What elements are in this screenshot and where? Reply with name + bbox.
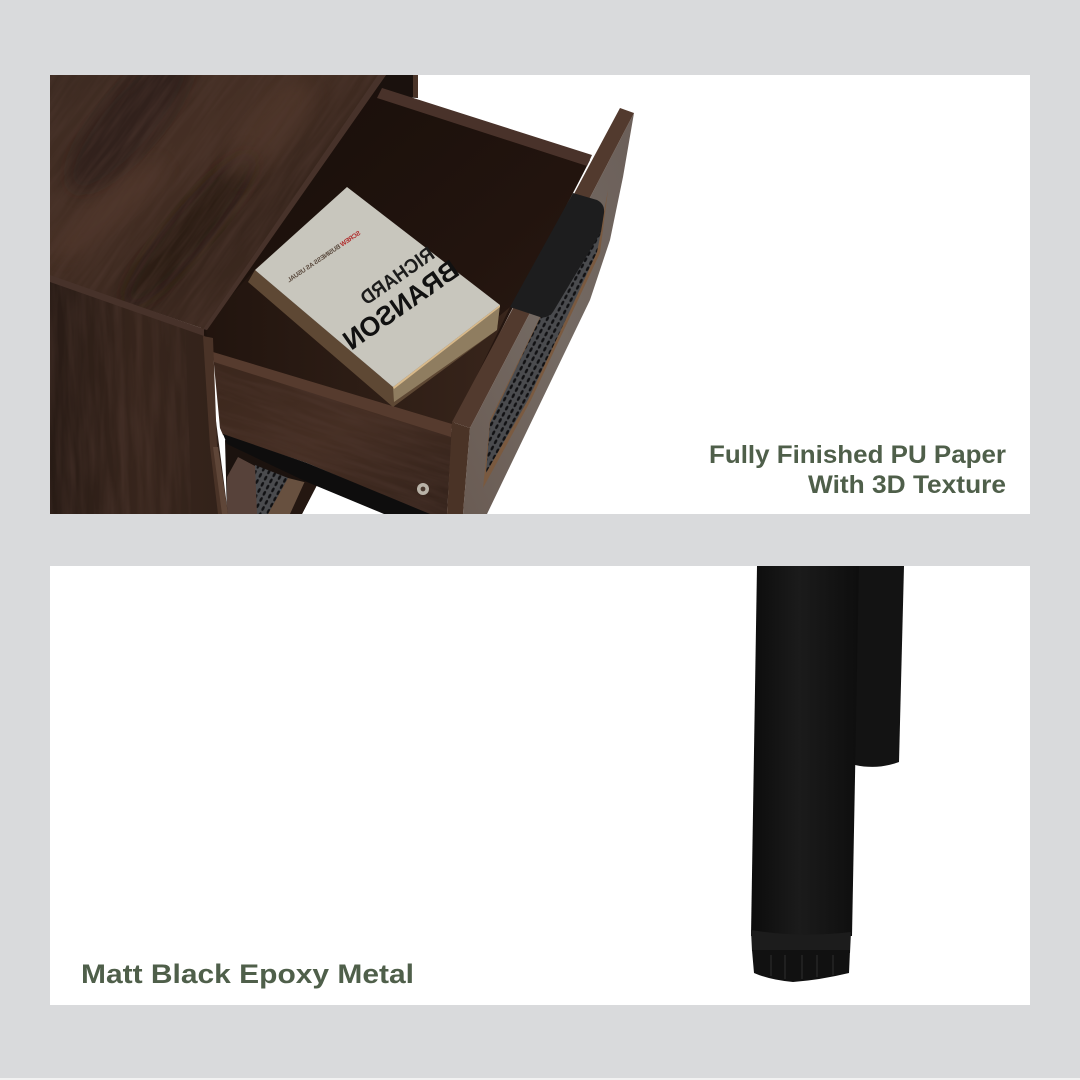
drawer front top edge — [452, 108, 634, 428]
drawer floor — [292, 308, 510, 429]
lower drawer — [225, 440, 317, 514]
mesh window rim — [483, 190, 608, 488]
book pages and spine — [248, 270, 500, 407]
drawer front face — [463, 113, 634, 514]
book: BRANSON — [337, 254, 464, 356]
caption: PU paper: With 3D Texture — [808, 471, 1006, 499]
panel: matt black metal — [50, 566, 1030, 1005]
front table leg — [751, 566, 859, 936]
screw — [417, 483, 429, 495]
photo: open walnut drawer — [50, 75, 634, 514]
adjustable foot — [752, 950, 850, 982]
drawer back rim — [377, 88, 592, 166]
caption: PU paper: Fully Finished PU Paper — [709, 441, 1006, 469]
rear table leg — [855, 566, 904, 767]
mesh panel — [486, 232, 601, 473]
book author name: RICHARD — [357, 243, 439, 310]
drawer interior — [200, 85, 590, 425]
book subtitle: SCREW BUSINESS AS USUAL — [286, 230, 362, 284]
book — [248, 187, 500, 407]
leg collar — [751, 930, 851, 953]
caption: PU paper — [709, 441, 1006, 499]
table side panel — [50, 280, 228, 514]
caption: matt black: Matt Black Epoxy Metal — [81, 959, 414, 989]
book cover — [255, 187, 500, 387]
panel: PU paper texture — [50, 75, 1030, 514]
back cabinet edge — [378, 75, 418, 98]
drawer near side wall — [214, 358, 452, 514]
black handle — [510, 193, 604, 317]
table top edge banding — [50, 275, 204, 336]
table top — [50, 75, 386, 330]
drawer front side strip — [447, 422, 470, 514]
slide rail — [223, 434, 430, 514]
